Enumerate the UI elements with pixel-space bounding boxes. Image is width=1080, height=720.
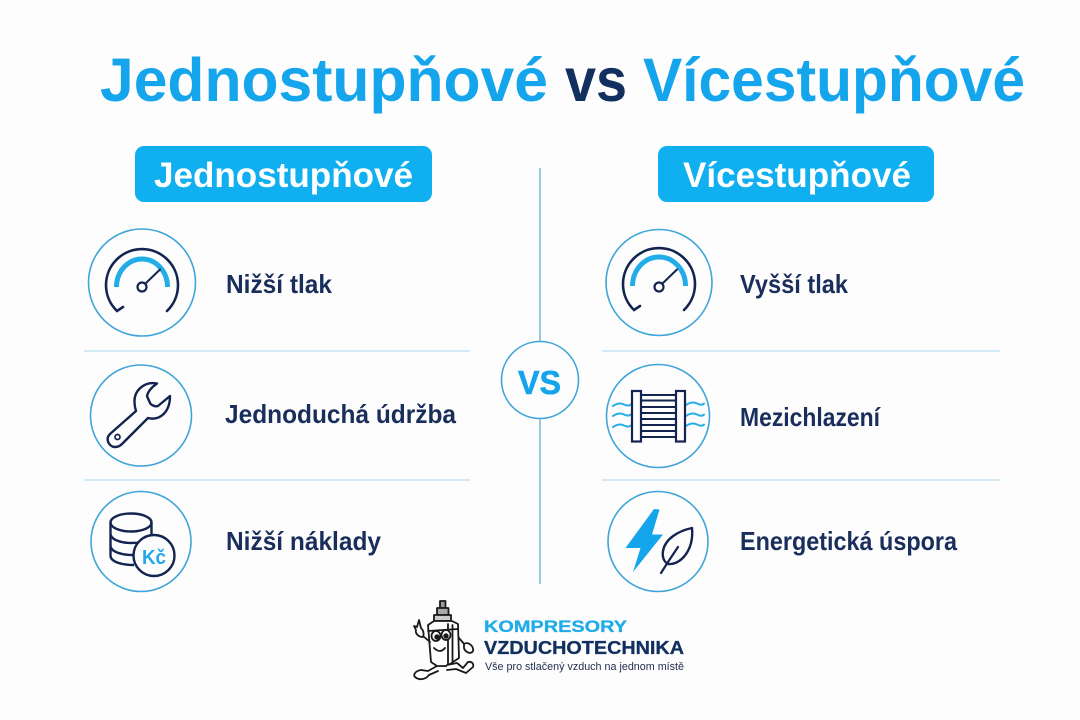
icon: wrench bbox=[90, 365, 192, 466]
icon: gauge high pressure bbox=[606, 230, 712, 336]
logo: VZDUCHOTECHNIKA bbox=[484, 638, 684, 658]
vs badge: VS bbox=[518, 364, 561, 401]
label: Energetická úspora: Energetická úspora bbox=[740, 526, 957, 556]
icon: gauge low pressure bbox=[88, 229, 196, 336]
logo text: KOMPRESORY bbox=[484, 617, 628, 636]
title: Jednostupňové bbox=[100, 46, 548, 114]
title: vs bbox=[565, 46, 627, 114]
heading: Vícestupňové: Vícestupňové bbox=[683, 156, 911, 195]
icon: compressor mascot bbox=[414, 601, 473, 679]
heading: Jednostupňové bbox=[135, 146, 432, 202]
label: Nižší náklady: Nižší náklady bbox=[226, 526, 382, 556]
label: Mezichlazení: Mezichlazení bbox=[740, 402, 881, 432]
logo bbox=[414, 601, 684, 679]
logo: Vše pro stlačený vzduch na jednom místě bbox=[485, 661, 684, 673]
heading: Vícestupňové bbox=[658, 146, 934, 202]
label: Nižší tlak: Nižší tlak bbox=[226, 269, 332, 299]
icon: lightning bolt and leaf bbox=[608, 492, 708, 592]
icon: coins with Kč: Kč bbox=[142, 547, 166, 569]
icon: coins with Kč bbox=[91, 492, 191, 592]
heading: Jednostupňové: Jednostupňové bbox=[154, 156, 413, 195]
title: Vícestupňové bbox=[643, 46, 1025, 114]
label: Vyšší tlak: Vyšší tlak bbox=[740, 269, 848, 299]
icon: intercooler bbox=[606, 364, 710, 468]
title bbox=[100, 46, 1025, 114]
vs badge bbox=[502, 342, 578, 418]
label: Jednoduchá údržba: Jednoduchá údržba bbox=[225, 399, 457, 429]
